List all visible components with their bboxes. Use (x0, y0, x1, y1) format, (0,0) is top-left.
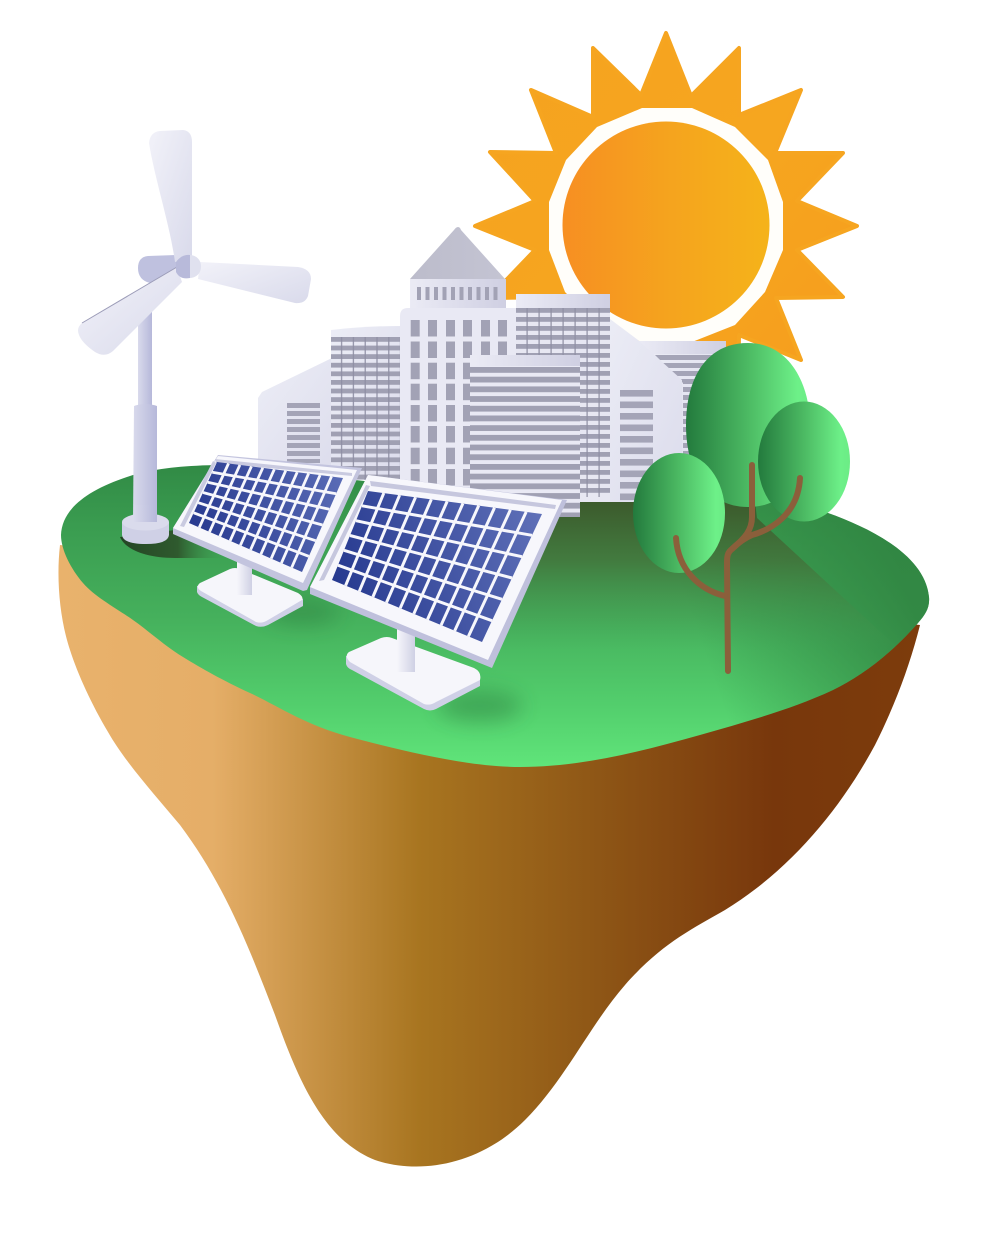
left panel shadow (267, 599, 339, 625)
front striped building (470, 355, 580, 517)
turbine blade: left (78, 267, 182, 355)
right panel base (346, 637, 480, 710)
left panel grid (194, 464, 336, 568)
turbine base (122, 522, 169, 544)
tree canopy: right (758, 402, 850, 522)
trees (633, 343, 850, 671)
tower vents (417, 287, 498, 300)
left panel post (237, 560, 252, 595)
turbine nacelle (138, 255, 176, 283)
central tower (400, 227, 516, 490)
tower roof (410, 227, 505, 279)
right wing building (600, 316, 682, 502)
solar panel: left (173, 455, 362, 627)
turbine blade: right (198, 262, 311, 303)
left wing building (258, 358, 340, 470)
right panel post (397, 628, 415, 672)
wind turbine (78, 130, 311, 558)
right panel shadow (438, 690, 522, 722)
sun (475, 33, 857, 417)
turbine blade: top (149, 130, 192, 262)
tree trunk and branches (676, 465, 800, 671)
turbine ground shadow (120, 530, 226, 558)
sun rays (475, 33, 857, 417)
tower windows (411, 320, 507, 486)
right panel frame (310, 475, 567, 668)
second building (331, 326, 402, 480)
island grass top (61, 465, 929, 767)
turbine hub (177, 255, 201, 278)
sun ring (549, 108, 783, 342)
back right striped building (516, 294, 610, 502)
left panel frame (173, 455, 362, 591)
tree canopy: left (633, 453, 725, 573)
city buildings (258, 227, 726, 517)
sun disc (562, 122, 770, 328)
left panel base (197, 568, 303, 627)
tree canopy: large back (686, 343, 810, 507)
right panel cells (332, 491, 542, 642)
turbine tower (138, 290, 152, 405)
far right building (638, 341, 726, 501)
right panel grid (338, 493, 532, 636)
grass shade behind city (500, 502, 900, 650)
solar panel: right (310, 475, 567, 722)
left panel cells (189, 462, 343, 572)
island soil body (58, 545, 920, 1167)
